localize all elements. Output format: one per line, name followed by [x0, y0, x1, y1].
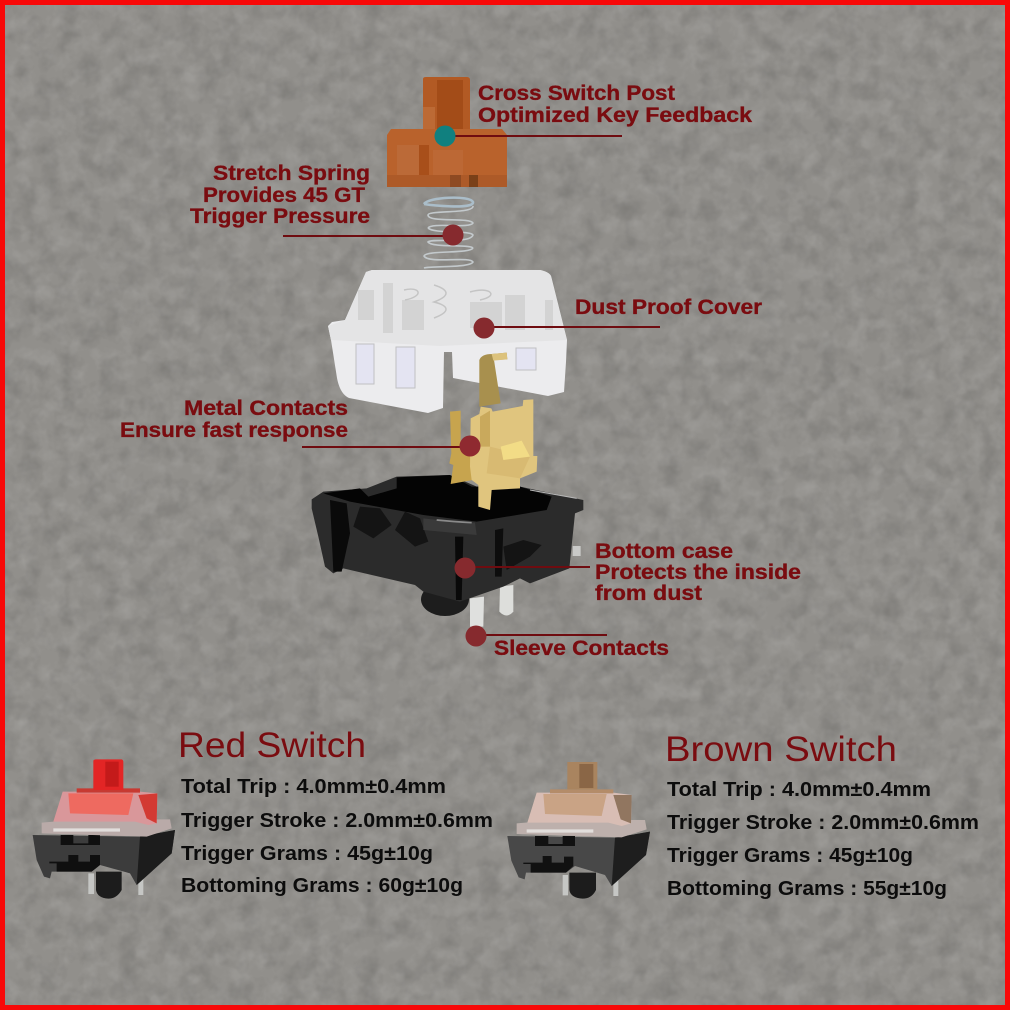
specs: brown switch	[667, 779, 979, 900]
label: stretch spring	[190, 162, 370, 228]
label: metal contacts: Metal Contacts	[184, 397, 348, 420]
label: metal contacts: Ensure fast response	[120, 419, 348, 442]
label: stretch spring: Provides 45 GT	[203, 184, 365, 207]
label: bottom case: Protects the inside	[595, 561, 801, 584]
label: dust proof cover: Dust Proof Cover	[575, 296, 762, 319]
specs: red switch: Bottoming Grams : 60g±10g	[181, 875, 463, 897]
specs: brown switch: Bottoming Grams : 55g±10g	[667, 878, 947, 900]
leader: sleeve contacts	[466, 626, 607, 646]
label: cross switch post: Optimized Key Feedback	[478, 104, 752, 127]
label: stretch spring: Stretch Spring	[213, 162, 370, 185]
label: stretch spring: Trigger Pressure	[190, 205, 370, 228]
icon: black bottom case	[312, 475, 583, 627]
panel: brown switch	[507, 730, 979, 900]
heading: brown switch: Brown Switch	[665, 730, 897, 769]
specs: red switch: Total Trip : 4.0mm±0.4mm	[181, 776, 446, 798]
icon: transparent dust cover	[328, 270, 567, 413]
icon: orange cross stem	[387, 77, 507, 187]
specs: brown switch: Total Trip : 4.0mm±0.4mm	[667, 779, 931, 801]
heading: red switch: Red Switch	[178, 726, 366, 765]
panel: red switch	[33, 726, 493, 899]
icon: gold metal contacts	[449, 353, 537, 510]
specs: red switch: Trigger Grams : 45g±10g	[181, 843, 433, 865]
leader: bottom case	[454, 558, 590, 578]
specs: red switch: Trigger Stroke : 2.0mm±0.6mm	[181, 810, 493, 832]
label: metal contacts	[120, 397, 348, 442]
specs: brown switch: Trigger Grams : 45g±10g	[667, 845, 913, 867]
leader: cross switch post	[434, 126, 622, 146]
specs: red switch	[181, 776, 493, 897]
icon: brown switch	[507, 762, 650, 899]
icon: red switch	[33, 759, 175, 899]
icon: exploded keyboard switch	[312, 77, 583, 627]
label: cross switch post: Cross Switch Post	[478, 82, 675, 105]
leader: stretch spring	[283, 224, 464, 246]
leader: dust proof cover	[474, 318, 660, 338]
label: bottom case: from dust	[595, 582, 702, 605]
icon: spring	[424, 198, 473, 268]
label: bottom case: Bottom case	[595, 540, 733, 563]
leader: metal contacts	[302, 436, 480, 456]
specs: brown switch: Trigger Stroke : 2.0mm±0.6mm	[667, 812, 979, 834]
label: cross switch post	[478, 82, 752, 127]
label: sleeve contacts: Sleeve Contacts	[494, 637, 669, 660]
label: bottom case	[595, 540, 801, 605]
